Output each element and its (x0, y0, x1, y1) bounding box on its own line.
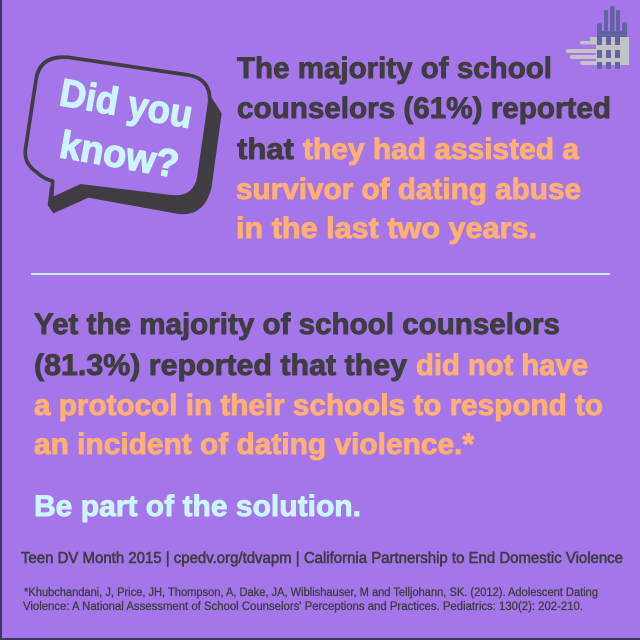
text block: schools without a protocol: a protocol in their schools to respond to (34, 389, 603, 422)
bubble text: know?: know? (56, 124, 182, 187)
text block: schools without a protocol: an incident of dating violence.* (34, 428, 474, 461)
text block: counselors who assisted survivors: in the last two years. (236, 212, 537, 245)
bubble text: Did you: Did you (56, 72, 196, 137)
text block: schools without a protocol: Yet the majority of school counselors (34, 308, 560, 341)
citation (23, 587, 598, 613)
text block: counselors who assisted survivors: survivor of dating abuse (236, 173, 581, 206)
bubble shape with shadow (25, 57, 222, 214)
call to action: Be part of the solution. (34, 490, 361, 523)
text block: counselors who assisted survivors (236, 52, 611, 245)
text block: counselors who assisted survivors: they had assisted a (303, 133, 579, 166)
icon: woven hands logo (566, 6, 629, 69)
text block: schools without a protocol: (81.3%) reported that they (34, 349, 407, 382)
text block: counselors who assisted survivors: The majority of school (237, 52, 552, 85)
footer campaign line: Teen DV Month 2015 | cpedv.org/tdvapm | California Partnership to End Domestic Violence (21, 550, 623, 567)
text block: schools without a protocol: did not have (416, 349, 588, 382)
citation: *Khubchandani, J, Price, JH, Thompson, A, Dake, JA, Wiblishauser, M and Telljohann, SK. (2012). Adolescent Dating (24, 587, 598, 599)
citation: Violence: A National Assessment of School Counselors' Perceptions and Practices. Pediatrics: 130(2): 202-210. (23, 601, 583, 613)
speech bubble: did you know (25, 57, 222, 214)
text block: counselors who assisted survivors: counselors (61%) reported (237, 92, 611, 125)
text block: counselors who assisted survivors: that (237, 133, 294, 166)
text block: schools without a protocol (34, 308, 603, 461)
